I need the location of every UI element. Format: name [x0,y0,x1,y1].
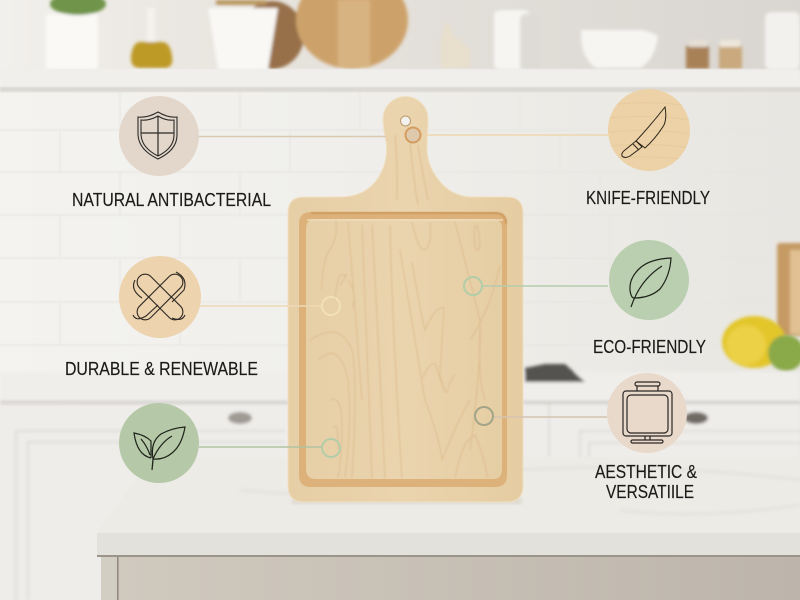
label: AESTHETIC & [595,462,697,482]
icon: leaf [609,240,689,320]
callout: knife-friendly [586,89,710,208]
lemon and lime [722,316,800,371]
left white cabinet [0,404,160,600]
back counter [0,364,800,600]
callout: durable and renewable [65,256,258,379]
shelf items [46,0,800,70]
wooden board on right [777,243,800,336]
shelf [0,69,800,92]
handle hole [400,116,410,126]
icon: shield [119,96,199,176]
callout: natural antibacterial [72,96,271,210]
tile joints [0,92,800,345]
label: DURABLE & RENEWABLE [65,359,258,379]
front counter [97,457,800,600]
icon: interlocked links [119,256,201,338]
label: ECO-FRIENDLY [593,337,706,357]
juice groove [299,212,507,487]
icon: two leaves [119,403,199,483]
board body [288,96,523,502]
connector lines [198,135,608,447]
label: NATURAL ANTIBACTERIAL [72,190,271,210]
callout: aesthetic and versatile [595,373,697,502]
label [595,462,697,502]
wood grain [310,135,500,478]
callout: leaves [119,403,199,483]
connector rings [322,128,493,457]
callout: eco-friendly [593,240,706,357]
label: KNIFE-FRIENDLY [586,188,710,208]
icon: knife on wood [608,89,690,171]
board shadow [292,498,522,504]
icon: board on stand [607,373,687,453]
label: VERSATIILE [606,482,694,502]
cutting board [288,96,523,502]
